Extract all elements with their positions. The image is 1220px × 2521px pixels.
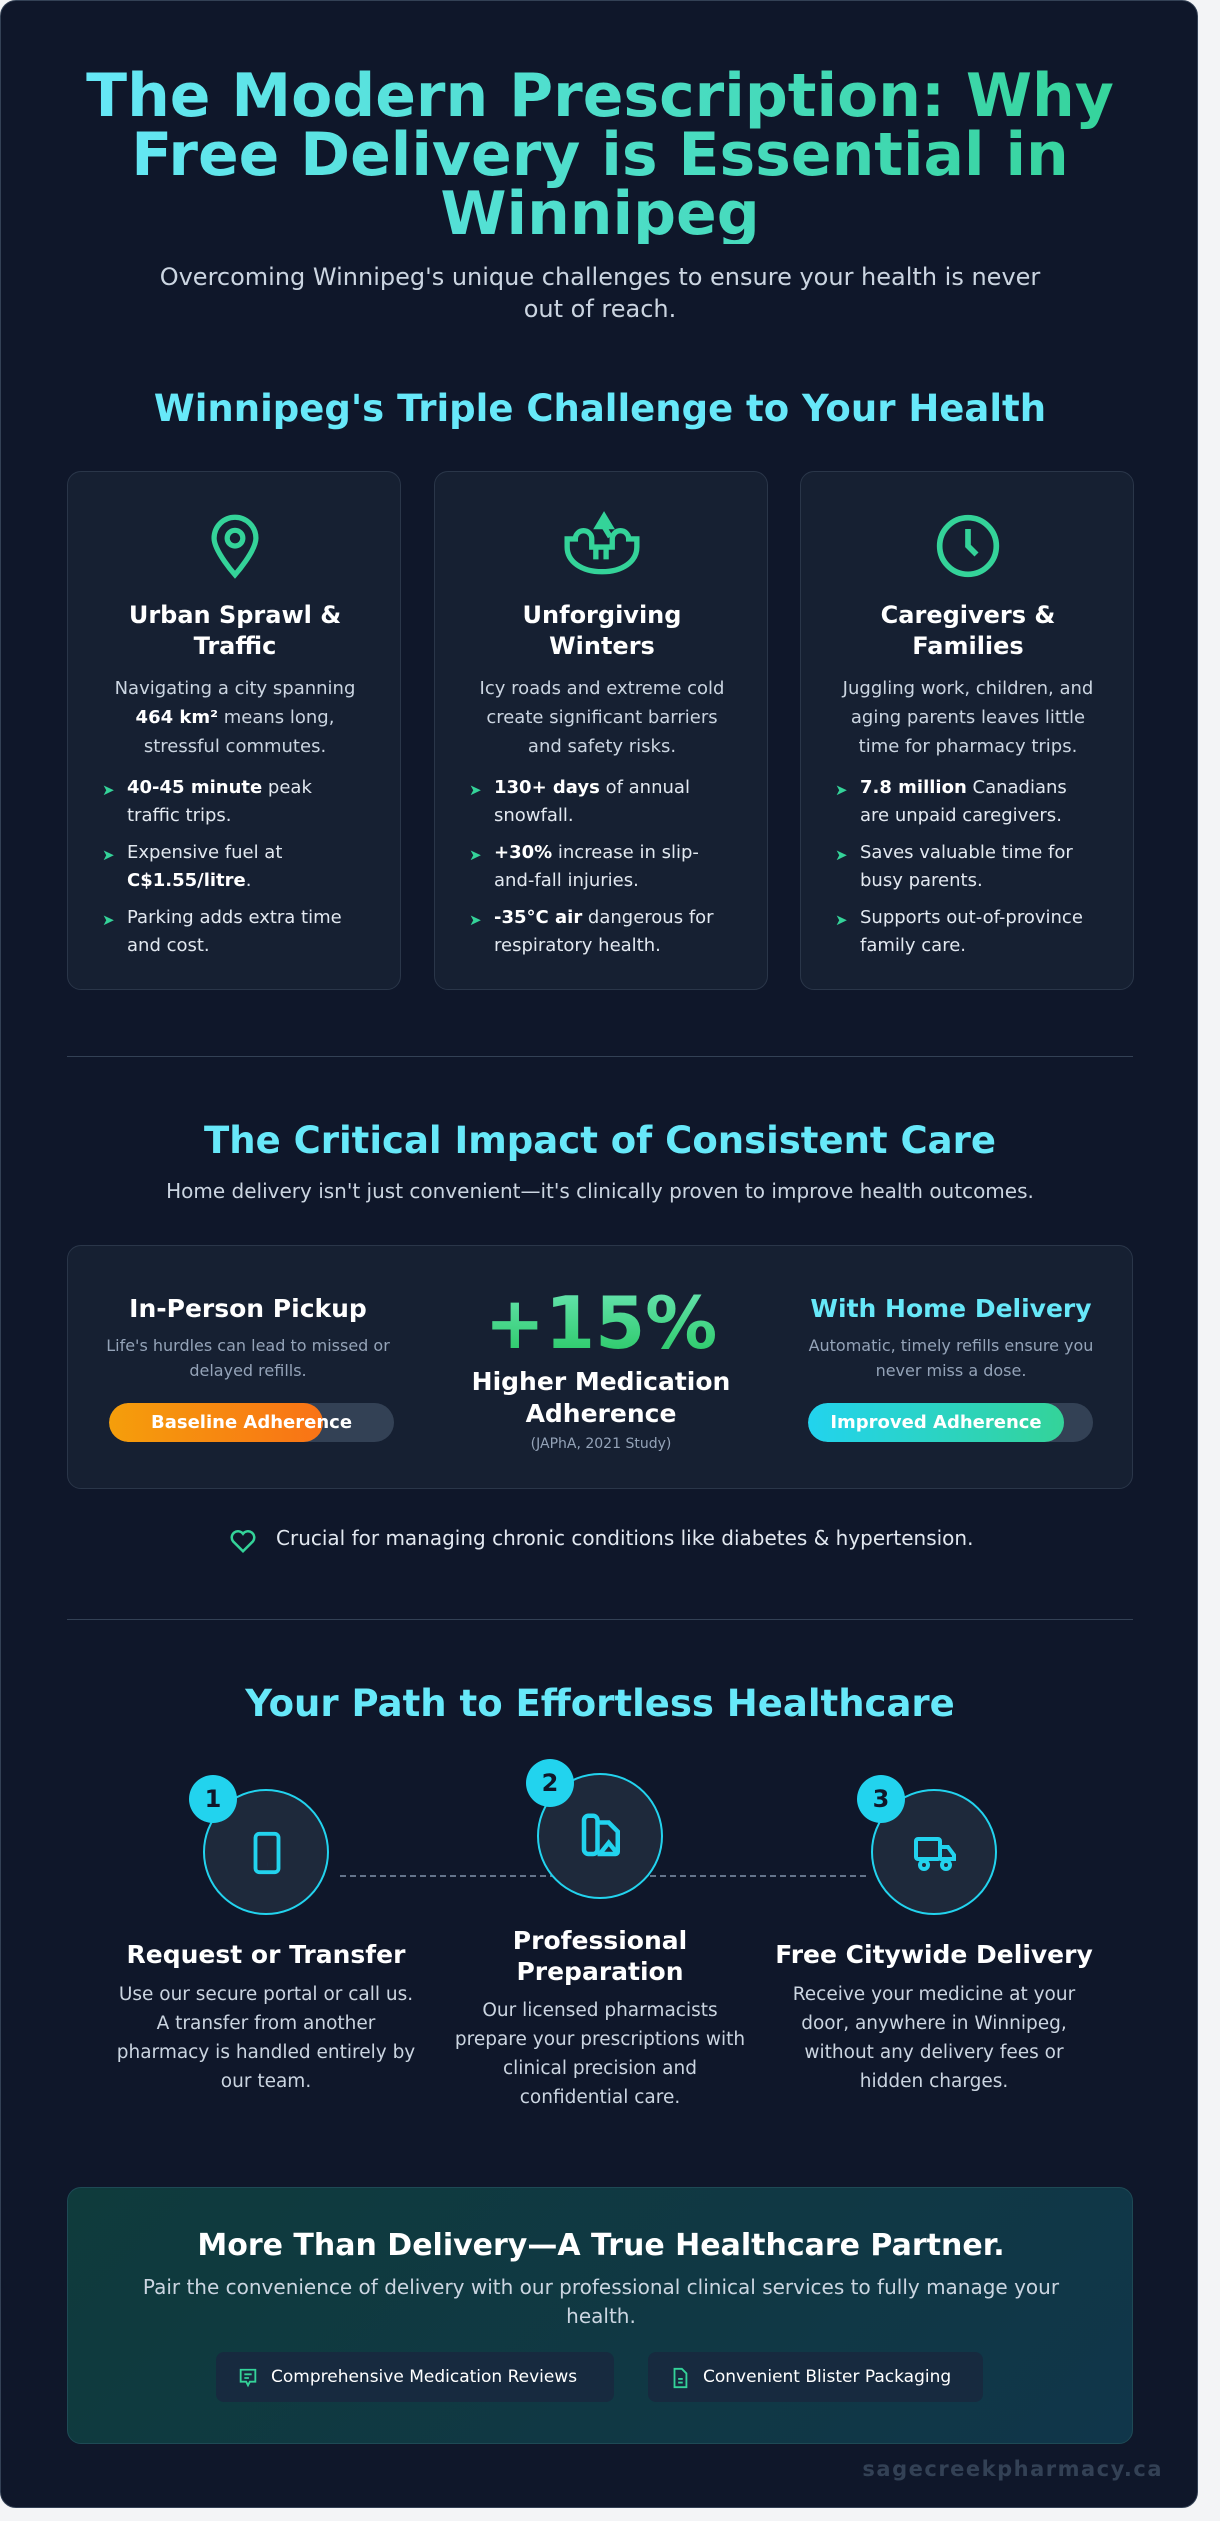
step 1: Request or Transfer xyxy=(127,1940,405,1969)
card title: Unforgiving Winters xyxy=(523,601,681,660)
bullets: +30% increase in slip-and-fall injuries. xyxy=(494,842,699,891)
bullets: Expensive fuel at C$1.55/litre. xyxy=(127,842,282,891)
icon: pill box xyxy=(537,1773,663,1899)
with home delivery xyxy=(808,1294,1093,1380)
stat +15%: +15% xyxy=(485,1281,717,1365)
panel: winters xyxy=(434,471,768,990)
with home delivery: With Home Delivery xyxy=(810,1294,1092,1323)
panel: urban sprawl xyxy=(67,471,401,990)
step 1 xyxy=(117,1775,415,2092)
bar: baseline: Baseline Adherence xyxy=(151,1412,352,1433)
step 3: Free Citywide Delivery xyxy=(775,1940,1093,1969)
chip: blister packaging: Convenient Blister Packaging xyxy=(703,2367,951,2387)
bullets: 7.8 million Canadians are unpaid caregivers. xyxy=(860,777,1067,826)
card description: Icy roads and extreme cold create significant barriers and safety risks. xyxy=(480,678,724,757)
card title: Caregivers & Families xyxy=(881,601,1055,660)
icon: phone xyxy=(203,1789,329,1915)
bullets: Saves valuable time for busy parents. xyxy=(860,842,1073,891)
subtitle: Overcoming Winnipeg's unique challenges to ensure your health is never out of reach. xyxy=(160,263,1040,323)
bullets: -35°C air dangerous for respiratory health. xyxy=(494,907,714,956)
chip: medication reviews: Comprehensive Medication Reviews xyxy=(271,2367,577,2387)
stat +15%: Higher Medication Adherence xyxy=(472,1367,730,1428)
bar: baseline xyxy=(109,1403,394,1442)
step 3 xyxy=(775,1775,1093,2092)
stat +15%: (JAPhA, 2021 Study) xyxy=(531,1436,671,1452)
heading: critical impact: The Critical Impact of Consistent Care xyxy=(204,1119,996,1162)
chip: blister packaging xyxy=(648,2352,983,2402)
in-person pickup xyxy=(106,1294,390,1380)
card description: Juggling work, children, and aging parents leaves little time for pharmacy trips. xyxy=(843,678,1093,757)
icon: snow bowl xyxy=(564,511,640,574)
title: The Modern Prescription: Why Free Delivery is Essential in Winnipeg xyxy=(86,61,1114,249)
footer url: sagecreekpharmacy.ca xyxy=(862,2457,1163,2481)
icon: heart xyxy=(230,1530,256,1553)
bullets: 130+ days of annual snowfall. xyxy=(494,777,690,826)
panel: adherence comparison xyxy=(67,1245,1133,1489)
bullets: Supports out-of-province family care. xyxy=(860,907,1083,956)
bullets xyxy=(470,777,714,956)
callout: chronic conditions: Crucial for managing chronic conditions like diabetes & hypertension. xyxy=(276,1526,973,1550)
bar: improved xyxy=(808,1403,1093,1442)
step 1: 1 xyxy=(205,1785,221,1813)
partner text: Pair the convenience of delivery with our professional clinical services to fully manage your health. xyxy=(143,2275,1059,2328)
step 2: Our licensed pharmacists prepare your prescriptions with clinical precision and confidential care. xyxy=(455,2000,745,2108)
stat +15% xyxy=(472,1281,730,1452)
with home delivery: Automatic, timely refills ensure you never miss a dose. xyxy=(809,1336,1093,1380)
bar: improved: Improved Adherence xyxy=(830,1412,1042,1433)
step 2: Professional Preparation xyxy=(513,1926,687,1986)
step 3: 3 xyxy=(873,1785,889,1813)
in-person pickup: Life's hurdles can lead to missed or delayed refills. xyxy=(106,1336,390,1380)
panel: caregivers xyxy=(800,471,1134,990)
bullets: 40-45 minute peak traffic trips. xyxy=(127,777,312,826)
step 2 xyxy=(455,1759,745,2108)
bullets xyxy=(104,777,342,956)
heading: triple challenge: Winnipeg's Triple Challenge to Your Health xyxy=(154,387,1046,430)
step 1: Use our secure portal or call us. A transfer from another pharmacy is handled entirely by our team. xyxy=(117,1984,415,2092)
card description: Navigating a city spanning 464 km² means long, stressful commutes. xyxy=(115,678,355,757)
icon: clock xyxy=(936,514,1000,578)
icon: map pin xyxy=(211,514,258,579)
panel: healthcare partner xyxy=(67,2187,1133,2444)
in-person pickup: In-Person Pickup xyxy=(129,1294,367,1323)
subheading: Home delivery isn't just convenient—it's clinically proven to improve health outcomes. xyxy=(166,1179,1034,1203)
chip: medication reviews xyxy=(216,2352,614,2402)
step 2: 2 xyxy=(542,1769,558,1797)
bullets xyxy=(836,777,1083,956)
card title: Urban Sprawl & Traffic xyxy=(129,601,341,660)
heading: path: Your Path to Effortless Healthcare xyxy=(245,1682,955,1725)
partner title: More Than Delivery—A True Healthcare Partner. xyxy=(197,2228,1005,2263)
dashed connector xyxy=(340,1875,866,1877)
bullets: Parking adds extra time and cost. xyxy=(127,907,342,956)
step 3: Receive your medicine at your door, anywhere in Winnipeg, without any delivery fees or hidden charges. xyxy=(793,1984,1075,2092)
icon: delivery truck xyxy=(871,1789,997,1915)
